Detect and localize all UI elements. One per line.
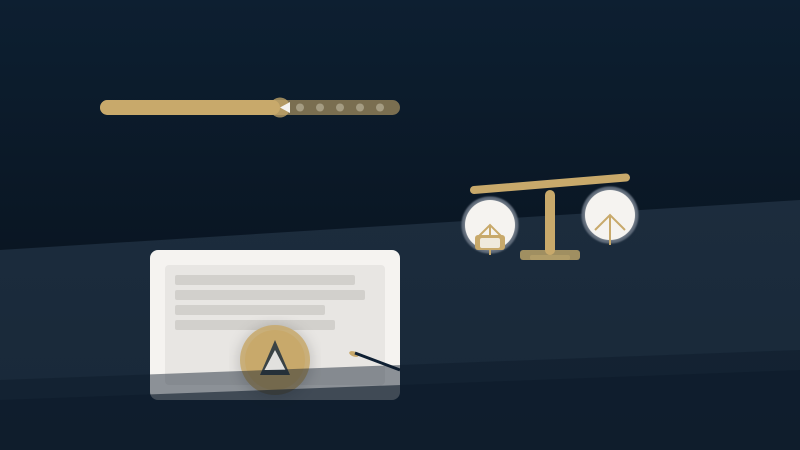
gold seal bbox=[240, 325, 310, 395]
left pan hanger bbox=[477, 225, 503, 255]
floor plane bbox=[0, 200, 800, 450]
seal triangle bbox=[260, 340, 290, 375]
inner panel bbox=[165, 265, 385, 385]
right pan bbox=[582, 186, 638, 245]
left pan bbox=[462, 196, 518, 255]
progress bar bbox=[100, 98, 400, 118]
pen bbox=[348, 350, 400, 370]
right pan hanger bbox=[595, 215, 625, 245]
progress knob bbox=[270, 98, 290, 118]
scale beam bbox=[474, 178, 626, 190]
text lines bbox=[175, 275, 365, 330]
progress dots bbox=[296, 104, 384, 112]
document card bbox=[150, 250, 400, 400]
progress track bbox=[100, 100, 400, 115]
foreground band bbox=[0, 370, 800, 450]
knob arrow bbox=[280, 102, 290, 113]
scale column bbox=[545, 190, 555, 255]
left pan weight bbox=[475, 235, 505, 250]
lower shadow band bbox=[0, 350, 800, 450]
progress fill bbox=[100, 100, 280, 115]
seal shadow bbox=[237, 324, 313, 400]
balance scale bbox=[462, 178, 638, 260]
scale base bbox=[520, 250, 580, 260]
